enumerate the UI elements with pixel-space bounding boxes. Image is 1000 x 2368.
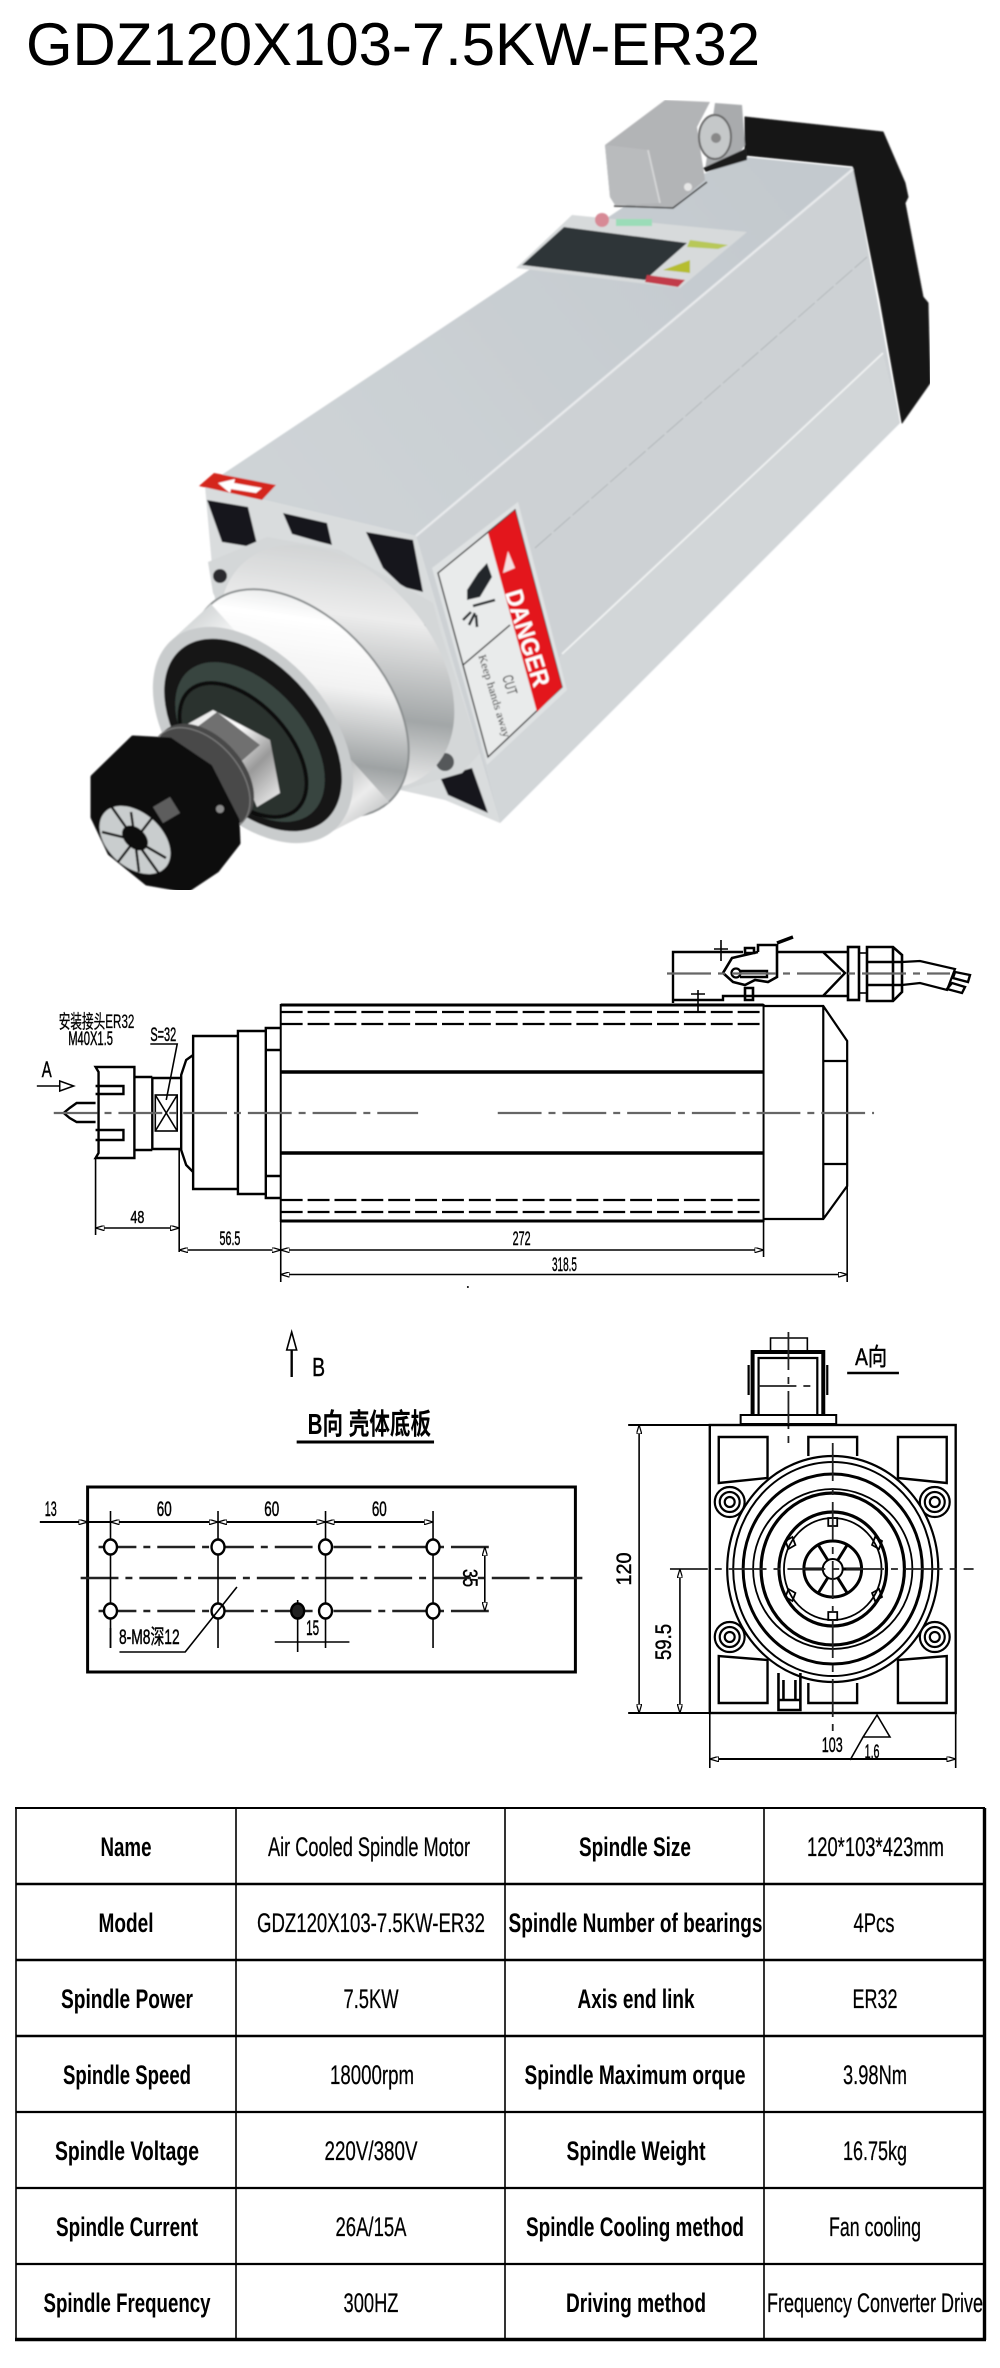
view arrow B: B <box>312 1354 325 1382</box>
specification table <box>15 1808 986 2340</box>
row: name: Air Cooled Spindle Motor <box>268 1832 470 1862</box>
housing front face <box>205 486 500 823</box>
heading: B view housing base: B向 壳体底板 <box>308 1409 431 1441</box>
danger sticker: CUT <box>498 673 520 697</box>
threaded nut <box>133 705 273 849</box>
danger sticker: DANGER <box>499 586 555 690</box>
spec plate <box>516 213 747 288</box>
row: power: 7.5KW <box>344 1984 399 2014</box>
dimension 35 <box>458 1547 485 1611</box>
front cooling windows <box>207 500 488 813</box>
spindle silver body <box>113 499 501 881</box>
dimension 272 <box>281 1221 764 1282</box>
row: frequency: 300HZ <box>344 2288 398 2318</box>
row: speed <box>63 2060 907 2090</box>
dimension 48: 48 <box>130 1207 144 1227</box>
danger sticker <box>432 502 567 765</box>
corner windows <box>719 1437 947 1703</box>
dimension 103: 103 <box>822 1734 843 1757</box>
row: voltage: Spindle Voltage <box>55 2136 199 2166</box>
end cap <box>764 1006 847 1219</box>
row: name <box>100 1832 944 1862</box>
row: speed: 18000rpm <box>330 2060 414 2090</box>
label: wrench flat <box>150 1025 177 1100</box>
top dimension chain: 60 <box>372 1498 387 1521</box>
dimension 15: 15 <box>306 1617 319 1640</box>
view arrow A: A <box>42 1057 52 1082</box>
roughness symbol 1.6: 1.6 <box>865 1742 880 1763</box>
view arrow B <box>287 1332 325 1382</box>
row: speed: Spindle Speed <box>63 2060 191 2090</box>
connector top view <box>741 1332 836 1443</box>
top dimension chain: 60 <box>264 1498 279 1521</box>
main housing <box>281 1005 764 1221</box>
side elevation drawing <box>37 1005 874 1288</box>
connector housing <box>605 100 747 208</box>
dimension 318.5: 318.5 <box>552 1255 577 1276</box>
shaft <box>177 710 280 807</box>
black fan cover and cable <box>745 117 930 423</box>
view arrow A <box>37 1057 74 1091</box>
dimension 15 <box>275 1617 349 1642</box>
row: name: Spindle Size <box>579 1832 691 1862</box>
heading: B view housing base <box>297 1409 434 1442</box>
row: model: GDZ120X103-7.5KW-ER32 <box>257 1908 485 1938</box>
plate outline <box>88 1487 575 1672</box>
label: thread: M40X1.5 <box>68 1029 113 1050</box>
row: frequency: Driving method <box>566 2288 706 2318</box>
row: name: Name <box>100 1832 152 1862</box>
centre lines <box>670 1443 974 1733</box>
base plate drawing <box>40 1332 582 1672</box>
row: voltage: Spindle Weight <box>566 2136 706 2166</box>
photo: air cooled spindle motor <box>86 100 930 890</box>
label: view A: A向 <box>855 1344 887 1371</box>
dimension 103 <box>710 1713 956 1768</box>
danger sticker: Keep hands away <box>476 653 512 740</box>
flange and nose <box>64 1028 281 1198</box>
row: voltage: 220V/380V <box>324 2136 418 2166</box>
housing square <box>710 1425 956 1713</box>
connector side view <box>667 937 970 1012</box>
bolt ears <box>715 1487 950 1652</box>
roughness symbol 1.6 <box>850 1715 890 1763</box>
row: voltage <box>55 2136 907 2166</box>
row: frequency: Spindle Frequency <box>44 2288 210 2318</box>
dimension 35: 35 <box>458 1569 481 1587</box>
dimension 59.5: 59.5 <box>651 1624 676 1660</box>
top dimension chain: 13 <box>45 1498 57 1521</box>
bottom cable gland <box>778 1673 800 1710</box>
dimension 120 <box>613 1425 710 1713</box>
row: current: Spindle Cooling method <box>526 2212 744 2242</box>
row: power <box>61 1984 898 2014</box>
label: install collet: 安装接头ER32 <box>59 1011 134 1033</box>
flange circles <box>727 1456 938 1682</box>
dimension 56.5: 56.5 <box>220 1229 240 1250</box>
hole callout: 8-M8深12 <box>119 1626 180 1649</box>
table grid <box>15 1808 986 2340</box>
front view drawing <box>613 1332 974 1768</box>
dimension 56.5 <box>179 1229 281 1250</box>
row: voltage: 16.75kg <box>843 2136 907 2166</box>
flange plate <box>208 537 480 790</box>
red arrow sticker <box>199 473 276 500</box>
row: speed: 3.98Nm <box>843 2060 907 2090</box>
top dimension chain: 60 <box>157 1498 172 1521</box>
centre and hole lines <box>81 1511 582 1652</box>
row: power: Spindle Power <box>61 1984 193 2014</box>
row: current: Spindle Current <box>56 2212 198 2242</box>
hole callout <box>111 1587 237 1652</box>
row: model: 4Pcs <box>854 1908 894 1938</box>
spindle housing top face <box>205 157 853 536</box>
row: model: Spindle Number of bearings <box>508 1908 762 1938</box>
dimension 48 <box>96 1150 179 1252</box>
dimension 120: 120 <box>613 1552 636 1586</box>
row: current: 26A/15A <box>336 2212 406 2242</box>
spindle housing side face <box>416 168 900 823</box>
row: frequency <box>44 2288 983 2318</box>
centre line <box>54 1112 874 1114</box>
mounting holes <box>104 1540 440 1618</box>
ER32 collet nut <box>86 738 238 890</box>
row: power: Axis end link <box>578 1984 695 2014</box>
row: model <box>98 1908 894 1938</box>
label: wrench flat: S=32 <box>150 1025 176 1046</box>
top dimension chain <box>40 1498 433 1522</box>
row: speed: Spindle Maximum orque <box>524 2060 746 2090</box>
row: power: ER32 <box>852 1984 898 2014</box>
row: current: Fan cooling <box>829 2212 921 2242</box>
row: current <box>56 2212 921 2242</box>
dimension 272: 272 <box>513 1229 531 1250</box>
title: GDZ120X103-7.5KW-ER32 <box>26 11 760 78</box>
row: model: Model <box>98 1908 154 1938</box>
